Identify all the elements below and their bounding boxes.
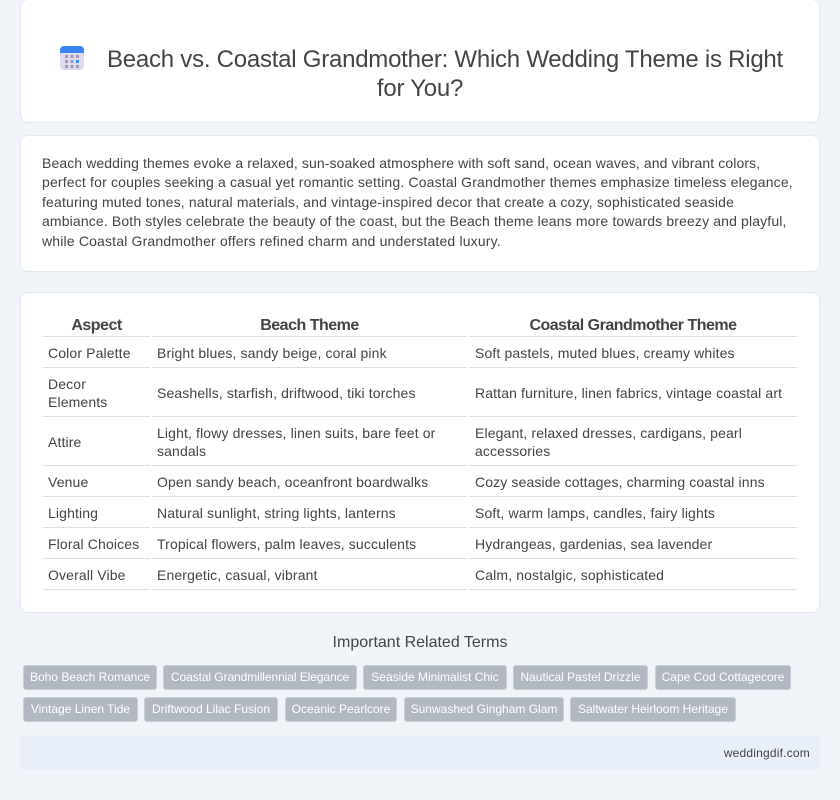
comparison table: Floral Choices	[48, 536, 139, 552]
intro text: while Coastal Grandmother offers refined charm and understated luxury.	[42, 233, 501, 249]
title	[107, 46, 783, 102]
related terms tags: Saltwater Heirloom Heritage	[578, 702, 728, 716]
comparison table: Open sandy beach, oceanfront boardwalks	[157, 474, 428, 490]
comparison table: Color Palette	[48, 345, 131, 361]
icon: calendar	[60, 46, 84, 70]
comparison table: Hydrangeas, gardenias, sea lavender	[475, 536, 712, 552]
title: Beach vs. Coastal Grandmother: Which Wedding Theme is Right	[107, 46, 783, 73]
comparison table: Venue	[48, 474, 88, 490]
table headers: Beach Theme	[260, 317, 359, 334]
intro text	[42, 154, 793, 249]
related terms tags: Oceanic Pearlcore	[292, 702, 390, 716]
comparison table: Natural sunlight, string lights, lanterns	[157, 505, 396, 521]
comparison table	[43, 317, 797, 590]
comparison table: Cozy seaside cottages, charming coastal inns	[475, 474, 765, 490]
comparison table: Soft pastels, muted blues, creamy whites	[475, 345, 735, 361]
related terms tags: Vintage Linen Tide	[31, 702, 130, 716]
related terms tags: Coastal Grandmillennial Elegance	[171, 670, 349, 684]
comparison table: sandals	[157, 443, 206, 459]
intro text: Beach wedding themes evoke a relaxed, sun-soaked atmosphere with soft sand, ocean waves, and vibrant colors,	[42, 154, 760, 170]
comparison table: accessories	[475, 443, 550, 459]
comparison table: Light, flowy dresses, linen suits, bare feet or	[157, 425, 435, 441]
comparison table: Elegant, relaxed dresses, cardigans, pearl	[475, 425, 742, 441]
footer source: weddingdif.com	[724, 746, 810, 760]
table headers: Aspect	[71, 317, 122, 334]
comparison table: Soft, warm lamps, candles, fairy lights	[475, 505, 715, 521]
comparison table: Overall Vibe	[48, 567, 126, 583]
table headers	[71, 317, 737, 334]
intro text: ambiance. Both styles celebrate the beauty of the coast, but the Beach theme leans more towards breezy and playful,	[42, 213, 787, 229]
comparison table: Tropical flowers, palm leaves, succulents	[157, 536, 416, 552]
related terms tags	[23, 665, 791, 722]
related terms heading: Important Related Terms	[333, 634, 507, 651]
comparison table panel	[20, 292, 820, 613]
comparison table: Attire	[48, 434, 81, 450]
table headers: Coastal Grandmother Theme	[529, 317, 737, 334]
comparison table: Decor	[48, 376, 86, 392]
comparison table: Rattan furniture, linen fabrics, vintage coastal art	[475, 385, 782, 401]
comparison table: Lighting	[48, 505, 98, 521]
comparison table: Seashells, starfish, driftwood, tiki torches	[157, 385, 416, 401]
header panel	[20, 0, 820, 123]
related terms tags: Boho Beach Romance	[30, 670, 150, 684]
title: for You?	[377, 75, 463, 102]
related terms tags: Seaside Minimalist Chic	[371, 670, 499, 684]
comparison table: Energetic, casual, vibrant	[157, 567, 318, 583]
intro text: featuring muted tones, natural materials, and vintage-inspired decor that create a cozy, sophisticated seaside	[42, 194, 734, 210]
intro text: perfect for couples seeking a casual yet romantic setting. Coastal Grandmother themes emphasize timeless elegance,	[42, 174, 793, 190]
related terms tags: Sunwashed Gingham Glam	[411, 702, 557, 716]
comparison table: Elements	[48, 394, 107, 410]
intro paragraph panel	[20, 135, 820, 272]
related terms tags: Nautical Pastel Drizzle	[520, 670, 641, 684]
related terms tags: Cape Cod Cottagecore	[662, 670, 784, 684]
footer bar	[20, 736, 820, 770]
related terms tags: Driftwood Lilac Fusion	[152, 702, 270, 716]
comparison table: Calm, nostalgic, sophisticated	[475, 567, 664, 583]
comparison table: Bright blues, sandy beige, coral pink	[157, 345, 387, 361]
